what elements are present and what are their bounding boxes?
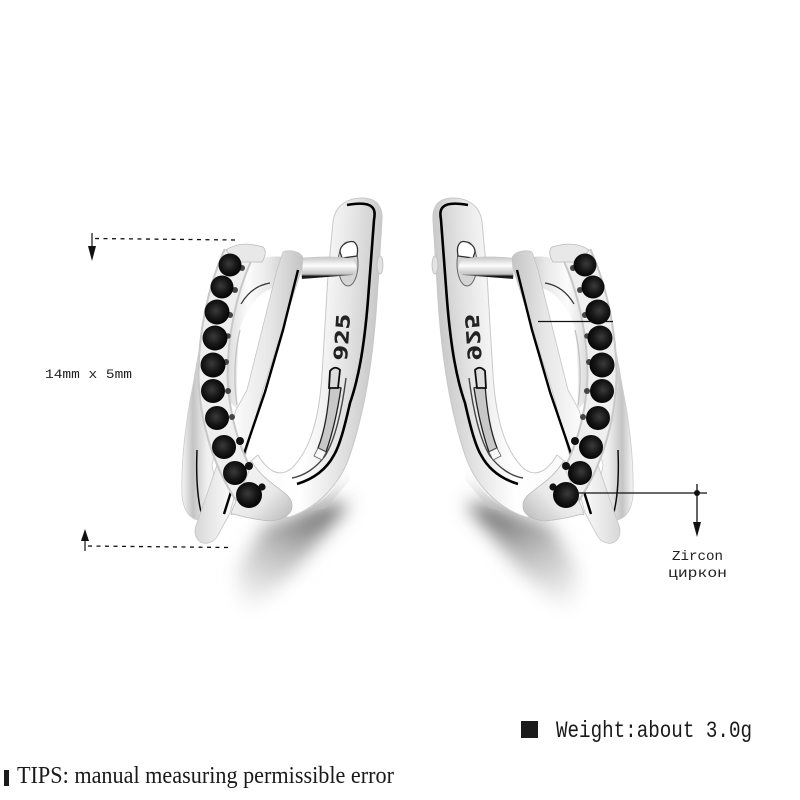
bottom dimension marker bbox=[81, 529, 229, 551]
left earring photo bbox=[182, 198, 383, 622]
size label: 14mm x 5mm bbox=[45, 367, 132, 382]
zircon label bbox=[668, 549, 727, 582]
weight note: Weight:about 3.0g bbox=[556, 718, 752, 744]
stamp: mirrored 925: 925 bbox=[460, 313, 485, 361]
zircon pointer with arrow bbox=[577, 484, 707, 537]
tips note: TIPS: manual measuring permissible error bbox=[17, 763, 394, 789]
zircon label: Zircon bbox=[672, 549, 723, 565]
top dimension marker bbox=[88, 233, 236, 261]
stamp: 925: 925 bbox=[330, 313, 355, 361]
zircon label: циркон bbox=[668, 566, 727, 582]
right earring photo bbox=[432, 198, 633, 622]
upper pointer line bbox=[538, 320, 613, 322]
